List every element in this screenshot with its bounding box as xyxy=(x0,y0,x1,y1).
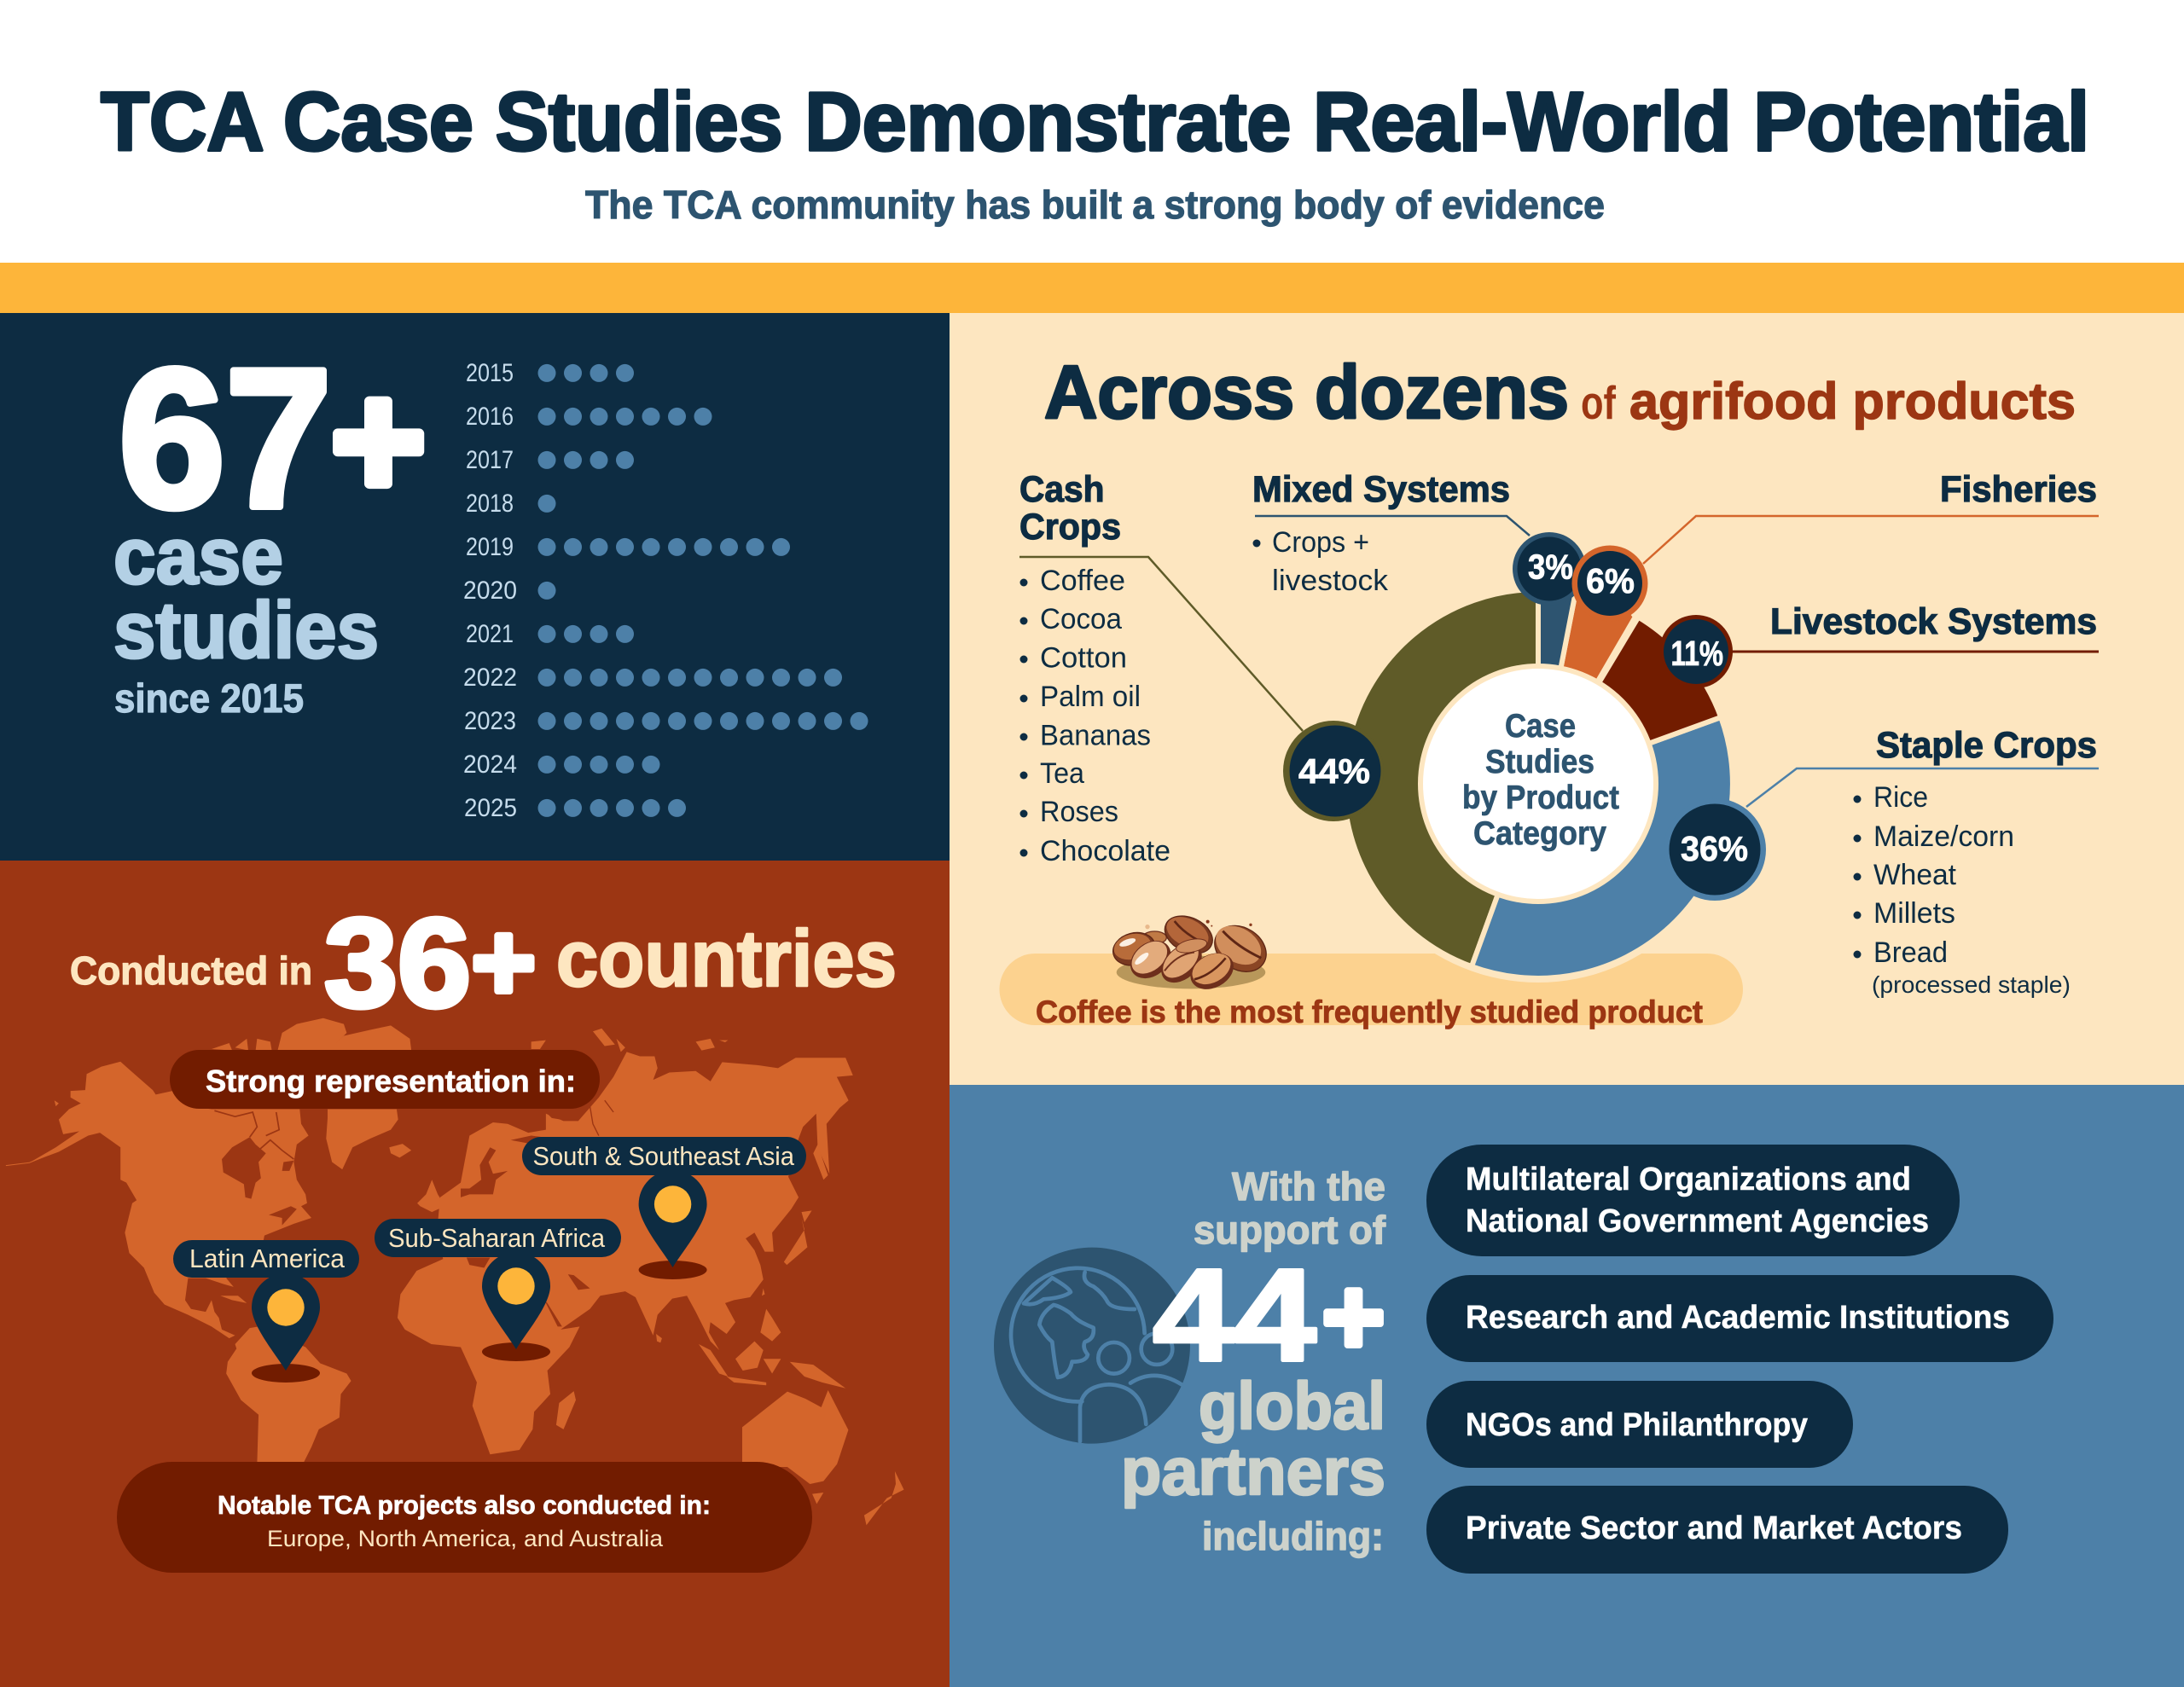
bubble: 44 percent xyxy=(1283,721,1384,821)
partner pill: private sector: Private Sector and Market Actors xyxy=(1466,1510,1962,1546)
row 2019 xyxy=(466,533,790,561)
donut centre label: Studies xyxy=(1485,744,1594,780)
row 2021: 2021 xyxy=(466,620,514,648)
slice: livestock xyxy=(1538,617,1721,784)
Hudson Bay xyxy=(222,1137,266,1199)
category: cash crops: Tea xyxy=(1040,757,1084,790)
slice: staple crops xyxy=(1472,717,1733,978)
heading: across dozens: agrifood products xyxy=(1629,373,2076,430)
heading: across dozens xyxy=(1044,350,2076,434)
callout: notable projects: Europe, North America, and Australia xyxy=(267,1526,664,1551)
case studies label xyxy=(113,511,379,721)
panel: countries xyxy=(0,861,950,1687)
partners stat text: global xyxy=(1199,1368,1385,1443)
partner pill: multilateral xyxy=(1426,1145,1960,1256)
row 2020: 2020 xyxy=(463,577,517,605)
icon: coffee beans xyxy=(1109,908,1275,996)
partner pill: multilateral: National Government Agencies xyxy=(1466,1203,1929,1239)
partners stat text: With the xyxy=(1232,1164,1385,1209)
bubble: 36 percent xyxy=(1664,798,1766,901)
bubble: 3 percent: 3% xyxy=(1528,548,1573,587)
row 2020 xyxy=(463,577,556,605)
category: staple crops xyxy=(1853,725,2097,998)
category: staple crops: Wheat xyxy=(1873,859,1957,891)
donut centre label: by Product xyxy=(1462,780,1619,816)
panel: agrifood products xyxy=(950,313,2184,1085)
category: cash crops: Cash xyxy=(1019,469,1104,510)
subtitle: The TCA community has built a strong body of evidence xyxy=(585,183,1605,227)
pin: Latin America: Latin America xyxy=(189,1244,346,1273)
row 2022: 2022 xyxy=(463,664,517,692)
heading: 36+ countries xyxy=(70,893,897,1034)
row 2016 xyxy=(466,403,712,431)
category: mixed systems xyxy=(1252,469,1510,597)
panel: case studies xyxy=(0,313,950,861)
row 2017: 2017 xyxy=(466,446,514,474)
header xyxy=(101,75,2089,227)
category: cash crops: Chocolate xyxy=(1040,835,1170,867)
bubble: 36 percent: 36% xyxy=(1681,829,1748,868)
donut chart xyxy=(1339,571,1737,983)
slice: mixed xyxy=(1538,571,1579,784)
pin: Sub-Saharan Africa xyxy=(375,1219,621,1361)
bubble: 11 percent xyxy=(1659,615,1733,688)
category: cash crops: Palm oil xyxy=(1040,681,1141,713)
partner pill: multilateral: Multilateral Organizations and xyxy=(1466,1162,1911,1197)
category: mixed systems: Mixed Systems xyxy=(1252,469,1510,510)
leader lines xyxy=(1019,516,2099,807)
bubble: 44 percent: 44% xyxy=(1298,751,1370,791)
slice: fisheries xyxy=(1538,574,1635,784)
world map xyxy=(6,1018,904,1525)
category: cash crops: Cocoa xyxy=(1040,603,1122,635)
row 2015: 2015 xyxy=(466,359,514,387)
category: staple crops: Staple Crops xyxy=(1876,725,2097,766)
category: livestock systems: Livestock Systems xyxy=(1770,601,2097,642)
row 2025 xyxy=(464,794,686,822)
row 2018: 2018 xyxy=(466,490,514,518)
row 2017 xyxy=(466,446,634,474)
map east xyxy=(398,1029,853,1454)
map west xyxy=(6,1018,445,1464)
icon: globe with people xyxy=(994,1248,1190,1444)
category: cash crops: Roses xyxy=(1040,796,1118,828)
bubble: 3 percent xyxy=(1513,532,1586,606)
partners stat text: partners xyxy=(1121,1434,1385,1509)
category: cash crops: Bananas xyxy=(1040,720,1151,752)
partner pill: research: Research and Academic Institutions xyxy=(1466,1300,2010,1336)
partners stat text: + xyxy=(1322,1258,1385,1377)
row 2024: 2024 xyxy=(463,751,517,779)
big number 67+: + xyxy=(331,351,426,531)
pin: South and Southeast Asia: South & Southeast Asia xyxy=(532,1141,795,1171)
partner pill: private sector xyxy=(1426,1486,2008,1574)
bubble: 11 percent: 11% xyxy=(1670,634,1723,673)
pill: strong representation xyxy=(170,1050,600,1109)
partner pill: NGOs xyxy=(1426,1381,1853,1468)
heading: 36+ countries: Conducted in xyxy=(70,948,312,993)
row 2021 xyxy=(466,620,634,648)
big number 67+: 67 xyxy=(119,328,332,549)
callout: notable projects xyxy=(117,1462,812,1573)
case studies label: case xyxy=(113,511,283,600)
row 2019: 2019 xyxy=(466,533,514,561)
pin: South and Southeast Asia xyxy=(522,1137,806,1279)
seas xyxy=(461,1147,508,1197)
partner pill: research xyxy=(1426,1275,2053,1362)
partners stat text xyxy=(1121,1164,1386,1558)
donut centre label: Category xyxy=(1473,815,1606,852)
category: staple crops: Millets xyxy=(1873,897,1955,930)
yellow band xyxy=(0,263,2184,313)
category: cash crops xyxy=(1019,469,1170,867)
donut centre label: Case xyxy=(1505,708,1576,745)
case studies label: studies xyxy=(113,585,379,675)
map south-east xyxy=(742,1390,904,1525)
row 2025: 2025 xyxy=(464,794,517,822)
category: mixed systems: Crops + xyxy=(1272,526,1369,559)
pin: Latin America xyxy=(173,1240,359,1383)
panel: partners xyxy=(950,1085,2184,1687)
partner pill: NGOs: NGOs and Philanthropy xyxy=(1466,1407,1808,1443)
row 2022 xyxy=(463,664,842,692)
row 2015 xyxy=(466,359,634,387)
callout: notable projects: Notable TCA projects also conducted in: xyxy=(218,1490,711,1520)
heading: across dozens: of xyxy=(1581,376,1617,429)
bubble: 6 percent: 6% xyxy=(1586,561,1635,600)
row 2018 xyxy=(466,490,556,518)
coffee banner text: Coffee is the most frequently studied product xyxy=(1036,994,1703,1029)
pin: Sub-Saharan Africa: Sub-Saharan Africa xyxy=(388,1223,606,1253)
heading: 36+ countries: + xyxy=(472,901,536,1023)
heading: 36+ countries: countries xyxy=(556,913,897,1003)
partners stat text: support of xyxy=(1194,1208,1386,1252)
category: staple crops: Maize/corn xyxy=(1873,820,2014,853)
pill: strong representation: Strong representation in: xyxy=(206,1064,576,1099)
title: TCA Case Studies Demonstrate Real-World Potential xyxy=(101,75,2089,168)
case studies label: since 2015 xyxy=(114,675,304,721)
row 2024 xyxy=(463,751,660,779)
row 2016: 2016 xyxy=(466,403,514,431)
coffee banner xyxy=(1000,954,1743,1025)
category: staple crops: Rice xyxy=(1873,781,1928,814)
category: staple crops: Bread xyxy=(1873,936,1948,969)
donut centre label xyxy=(1420,666,1656,901)
partners stat text: including: xyxy=(1202,1514,1384,1558)
category: cash crops: Coffee xyxy=(1040,565,1125,597)
row 2023: 2023 xyxy=(464,707,516,735)
heading: 36+ countries: 36 xyxy=(324,893,471,1034)
islands xyxy=(531,1029,728,1052)
partners stat text: 44 xyxy=(1153,1242,1316,1388)
heading: across dozens: Across dozens xyxy=(1044,350,1569,434)
category: mixed systems: livestock xyxy=(1272,565,1389,597)
category: cash crops: Cotton xyxy=(1040,641,1127,674)
category: cash crops: Crops xyxy=(1019,507,1121,548)
slice: cash crops xyxy=(1344,589,1538,966)
category: staple crops: (processed staple) xyxy=(1872,971,2071,998)
row 2023 xyxy=(464,707,868,735)
category: fisheries: Fisheries xyxy=(1940,469,2097,510)
dot chart by year xyxy=(463,359,868,822)
bubble: 6 percent xyxy=(1571,546,1648,621)
